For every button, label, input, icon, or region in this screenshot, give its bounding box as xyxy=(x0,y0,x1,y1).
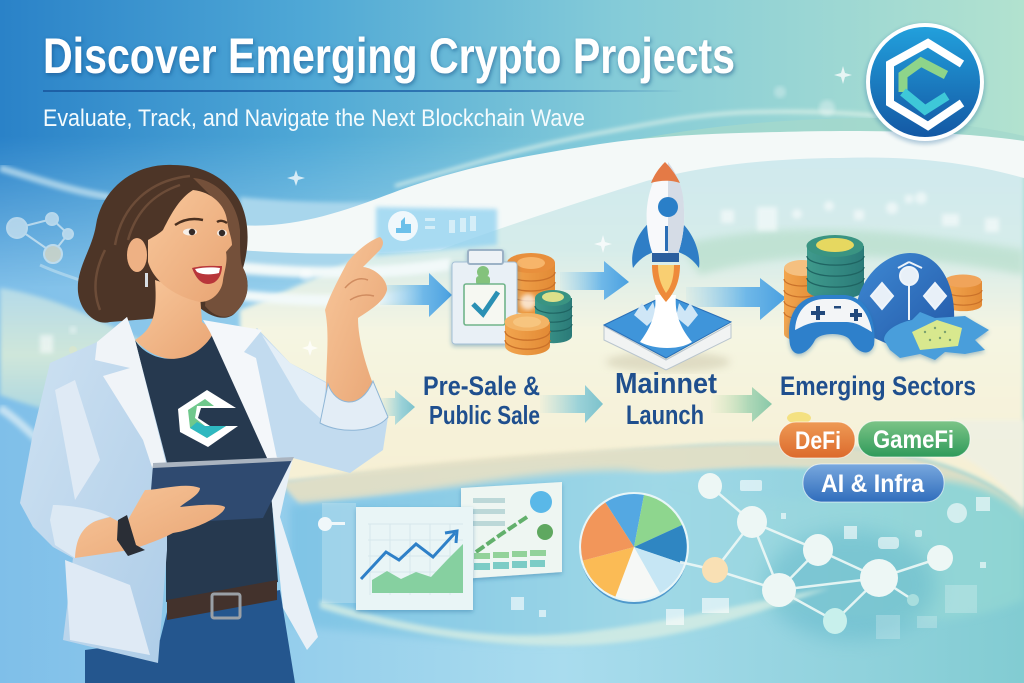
hair highlights xyxy=(95,176,190,310)
network graph xyxy=(511,473,990,639)
jacket right lapel xyxy=(203,320,277,458)
flame xyxy=(652,265,680,302)
sector pills xyxy=(779,412,970,502)
left pale band xyxy=(0,288,140,440)
jacket folds xyxy=(55,380,150,655)
ghost panels xyxy=(322,503,356,603)
icon: right orange coin stack xyxy=(944,274,982,311)
jacket right flap xyxy=(267,457,318,650)
floating like card xyxy=(376,207,497,256)
stage labels xyxy=(423,368,976,430)
light stripes xyxy=(240,258,450,306)
platform shadow xyxy=(606,352,730,372)
title block xyxy=(43,28,735,132)
label: pre-sale: Pre-Sale & xyxy=(423,371,540,401)
pill: ai and infra: AI & Infra xyxy=(821,470,925,498)
teal band above white wave xyxy=(560,118,1024,160)
thin light arc xyxy=(395,112,880,186)
label: mainnet: Mainnet xyxy=(615,368,717,400)
ear and earring xyxy=(127,238,148,287)
face xyxy=(148,190,232,302)
arrow: lower left xyxy=(380,390,415,425)
jacket left body xyxy=(20,317,167,663)
icon: green coin stack xyxy=(806,235,864,299)
arrow: lower right xyxy=(711,387,772,422)
subtitle: Evaluate, Track, and Navigate the Next Blockchain Wave xyxy=(43,105,585,132)
launch platform xyxy=(604,295,731,370)
arrow: lower middle xyxy=(540,385,603,423)
white wave xyxy=(240,131,1024,254)
analytics charts xyxy=(318,482,562,610)
label: launch: Launch xyxy=(626,400,704,430)
label: public sale: Public Sale xyxy=(429,400,540,430)
pill: ai and infra xyxy=(803,464,944,502)
smile xyxy=(192,266,222,284)
rolled sleeve cuff xyxy=(50,505,110,558)
pill: defi: DeFi xyxy=(795,427,841,455)
exhaust plume xyxy=(640,295,692,348)
stripes behind figure xyxy=(240,190,480,277)
mainnet rocket illustration xyxy=(604,162,731,372)
eyes and brows xyxy=(175,219,227,236)
step arrows, lower row xyxy=(380,385,772,425)
pale corner near pills xyxy=(940,420,1024,510)
brand logo badge xyxy=(865,23,985,144)
neck xyxy=(135,280,220,359)
belt xyxy=(167,580,277,620)
icon: green coin stack xyxy=(535,290,572,343)
teal green wave xyxy=(680,229,1024,275)
icon: blockchain gear xyxy=(884,312,989,360)
tablet xyxy=(150,457,294,523)
sectors illustration xyxy=(784,235,989,360)
icon: game controller xyxy=(789,295,874,354)
sparkles and glows xyxy=(69,66,852,356)
icon: left orange coin stack xyxy=(784,260,820,341)
lower wave xyxy=(290,470,1024,644)
faded left network xyxy=(7,213,73,263)
t-shirt xyxy=(135,332,278,602)
report card xyxy=(461,482,562,579)
small node xyxy=(318,517,345,531)
floating data bits xyxy=(511,480,990,625)
jeans xyxy=(85,590,295,683)
jacket left lapel xyxy=(95,317,166,510)
icon: AI network dome xyxy=(855,253,954,345)
arrow: to sectors xyxy=(686,278,786,320)
icon: large orange coin stack xyxy=(507,253,555,314)
main title: Discover Emerging Crypto Projects xyxy=(43,28,735,84)
rocket fins xyxy=(632,222,699,268)
rocket nose xyxy=(651,162,680,183)
pre-sale illustration xyxy=(376,207,572,355)
step arrows, upper row xyxy=(380,261,786,320)
rocket window xyxy=(658,197,678,217)
hair back xyxy=(78,165,248,323)
lower forearm and hand xyxy=(75,486,225,558)
tan band xyxy=(280,444,1024,520)
small coin behind pills xyxy=(787,412,811,424)
wristwatch xyxy=(117,515,145,556)
pie chart xyxy=(579,492,689,604)
line chart card xyxy=(356,507,473,610)
pill: gamefi xyxy=(858,421,970,457)
teal lens behind network xyxy=(765,530,935,640)
icon: front orange coin stack xyxy=(504,313,550,355)
rocket band xyxy=(652,253,679,262)
left thin streaks xyxy=(0,168,110,197)
arrow: to mainnet xyxy=(560,261,629,300)
pill: defi xyxy=(779,422,855,458)
arrow: to pre-sale xyxy=(380,273,452,317)
sleeve cuff xyxy=(320,381,388,430)
raised forearm and hand xyxy=(325,237,387,403)
presenter figure xyxy=(20,165,388,683)
jacket right sleeve xyxy=(240,328,388,473)
pill: gamefi: GameFi xyxy=(873,426,954,454)
shirt logo xyxy=(178,390,238,447)
label: emerging sectors: Emerging Sectors xyxy=(780,371,976,401)
icon: clipboard with check xyxy=(452,250,517,344)
main cream wave xyxy=(240,146,1024,510)
title rule xyxy=(43,90,683,92)
floating squares xyxy=(40,192,999,353)
rocket body xyxy=(647,162,684,254)
